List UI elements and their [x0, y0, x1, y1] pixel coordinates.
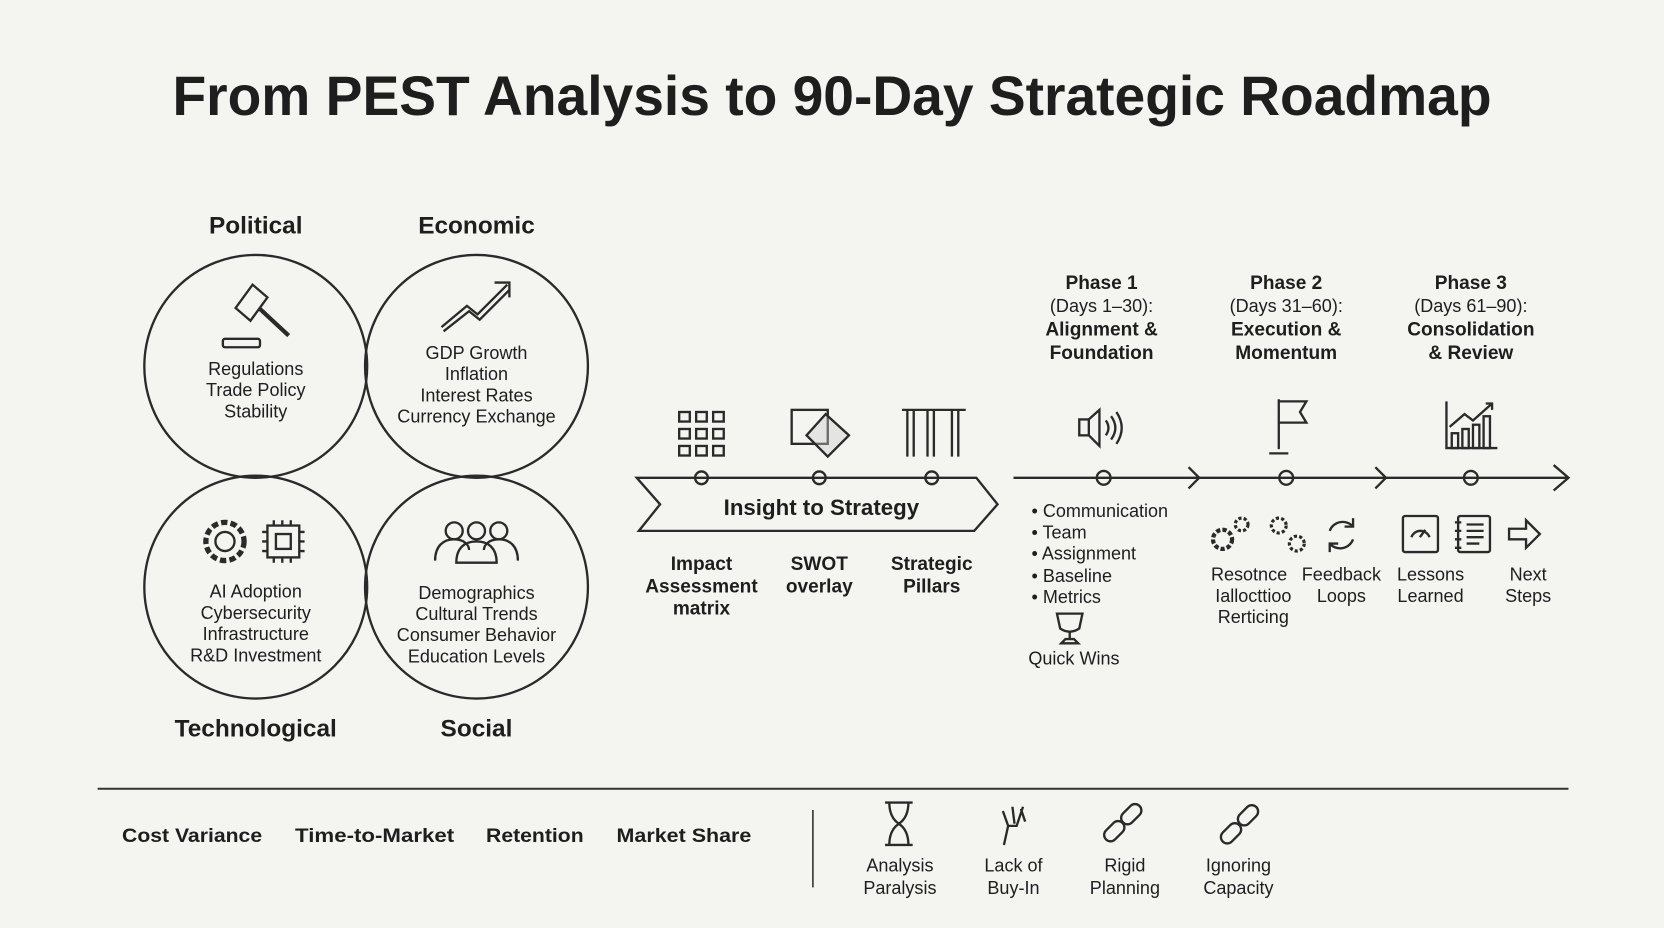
circle: economic: GDP Growth — [426, 343, 527, 363]
circle: political: Stability — [224, 401, 287, 421]
pitfalls row: Planning — [1090, 878, 1160, 898]
panel: insight to strategy: Pillars — [903, 576, 960, 597]
phase 3 items: Steps — [1505, 586, 1551, 606]
pitfalls row: Capacity — [1203, 878, 1274, 898]
phase 2 items: Resotnce — [1211, 565, 1287, 585]
phase 3 items — [1397, 516, 1551, 606]
circle: political: Trade Policy — [206, 380, 306, 400]
circle: political — [144, 255, 367, 478]
phase 3 heading: Consolidation — [1407, 320, 1534, 341]
panel: insight to strategy: overlay — [786, 576, 853, 597]
label: swot: SWOT — [791, 554, 848, 575]
circle: economic: Inflation — [445, 364, 508, 384]
phase 3 items: Next — [1510, 565, 1547, 585]
panel: insight to strategy: Insight to Strategy — [724, 495, 920, 520]
icon: gavel — [223, 285, 289, 347]
phase 2 heading: Phase 2 — [1250, 273, 1322, 294]
metrics row: Retention — [486, 826, 584, 847]
phase 3 items: Learned — [1397, 586, 1464, 606]
metrics row — [122, 826, 751, 847]
phase 1 list: • Team — [1032, 522, 1087, 542]
phase 2 items — [1211, 518, 1382, 627]
label: pillars: Strategic — [891, 554, 973, 575]
phase 3 items: Lessons — [1397, 565, 1464, 585]
icon: megaphone — [1079, 410, 1122, 446]
circle: technological: Infrastructure — [203, 624, 309, 644]
icon: trophy — [1057, 614, 1082, 643]
phase 1 heading: Foundation — [1050, 343, 1154, 364]
panel: 90-day timeline — [1013, 273, 1568, 669]
heading: Political: Political — [209, 213, 303, 240]
icon: hourglass — [885, 803, 913, 845]
phase 1 heading: Phase 1 — [1065, 273, 1138, 294]
icon: bar chart — [1446, 401, 1497, 448]
panel: insight to strategy: matrix — [673, 599, 731, 620]
circle: social: Demographics — [418, 583, 535, 603]
panel: insight to strategy — [637, 410, 998, 620]
icon: gear and chip — [206, 520, 305, 563]
circle: social — [365, 476, 588, 699]
phase 1 heading: Alignment & — [1045, 320, 1158, 341]
circle: social: Education Levels — [408, 646, 545, 666]
icon: swot overlay — [792, 410, 849, 457]
phase 1 list: • Communication — [1032, 501, 1168, 521]
pitfalls row: Lack of — [984, 856, 1044, 876]
circle: technological: Cybersecurity — [201, 603, 311, 623]
circle: technological: AI Adoption — [210, 582, 302, 602]
pitfalls row: Buy-In — [987, 878, 1040, 898]
phase 2 heading: Execution & — [1231, 320, 1342, 341]
circle: social: Cultural Trends — [415, 604, 538, 624]
circle: economic: Currency Exchange — [397, 407, 556, 427]
phase 2 heading: Momentum — [1235, 343, 1337, 364]
phase 1 list: • Assignment — [1032, 544, 1136, 564]
phase 3 heading: & Review — [1428, 343, 1513, 364]
panel: 90-day timeline: Quick Wins — [1028, 649, 1120, 669]
icon: growth arrow — [441, 283, 509, 331]
phase 1 list — [1032, 501, 1168, 607]
icon: matrix grid — [679, 412, 724, 456]
timeline arrow — [1013, 465, 1568, 491]
heading: Technological: Technological — [175, 716, 337, 743]
phase 3 heading: (Days 61–90): — [1414, 296, 1527, 316]
icon: hand — [1003, 807, 1025, 845]
phase 1 list: • Metrics — [1032, 587, 1101, 607]
icon: pillars — [902, 410, 966, 457]
arrow banner — [637, 478, 998, 531]
icon: people — [435, 522, 518, 563]
circle: technological: R&D Investment — [190, 645, 321, 665]
circle: technological — [144, 476, 367, 699]
title: From PEST Analysis to 90-Day Strategic Roadmap — [172, 65, 1492, 127]
pitfalls row: Paralysis — [863, 878, 936, 898]
circle: economic: Interest Rates — [420, 385, 533, 405]
metrics row: Market Share — [617, 826, 751, 847]
icon: flag — [1269, 399, 1306, 453]
phase 3 heading — [1407, 273, 1534, 364]
panel: PEST circles — [144, 213, 588, 743]
phase 2 items: Feedback — [1302, 565, 1382, 585]
metrics row: Time-to-Market — [295, 826, 455, 847]
phase 3 heading: Phase 3 — [1435, 273, 1507, 294]
pitfalls row: Ignoring — [1206, 856, 1271, 876]
icon: broken chain 2 — [1218, 803, 1261, 846]
phase 2 heading — [1230, 273, 1343, 364]
metrics row: Cost Variance — [122, 826, 262, 847]
pitfalls row: Rigid — [1104, 856, 1145, 876]
phase 1 list: • Baseline — [1032, 566, 1112, 586]
circle: economic — [365, 255, 588, 478]
icon: broken chain 1 — [1102, 801, 1144, 844]
circle: social: Consumer Behavior — [397, 625, 556, 645]
phase 2 items: Rerticing — [1218, 607, 1289, 627]
circle: political: Regulations — [208, 359, 303, 379]
panel: insight to strategy: Assessment — [645, 576, 758, 597]
phase 2 heading: (Days 31–60): — [1230, 296, 1343, 316]
pitfalls row: Analysis — [866, 856, 933, 876]
phase 1 heading — [1045, 273, 1158, 364]
phase 1 heading: (Days 1–30): — [1050, 296, 1153, 316]
pitfalls row — [863, 801, 1274, 898]
heading: Social: Social — [441, 716, 512, 743]
phase 2 items: Loops — [1317, 586, 1366, 606]
label: impact assessment: Impact — [671, 554, 733, 575]
phase 2 items: Iallocttioo — [1215, 586, 1291, 606]
heading: Economic: Economic — [418, 213, 535, 240]
